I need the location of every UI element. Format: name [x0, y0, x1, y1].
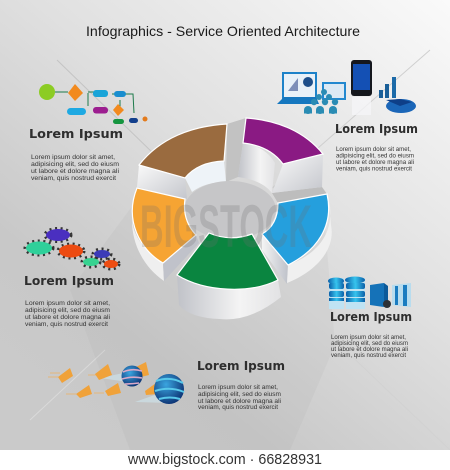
text block: left: adipisicing elit, sed do eiusm [25, 307, 110, 314]
text block: left: veniam, quis nostrud exercit [25, 321, 108, 328]
centre hub [184, 181, 276, 239]
stock watermark: BIGSTOCK [140, 193, 312, 260]
wall: brown outer [137, 165, 187, 199]
segment: orange [132, 188, 196, 263]
icon: flowchart [39, 84, 148, 124]
text block: left: Lorem Ipsum [24, 273, 114, 288]
text block: right: Lorem Ipsum [330, 309, 412, 324]
3D segmented ring chart [132, 118, 332, 319]
text block: top right: adipisicing elit, sed do eiusm [336, 152, 414, 160]
wall: blue outer band [287, 200, 332, 283]
title: Infographics - Service Oriented Architecture [86, 24, 360, 39]
stock footer text: www.bigstock.com · 66828931 [127, 451, 322, 468]
text block: bottom [197, 358, 285, 411]
wall: orange end [163, 235, 199, 281]
segment: brown [139, 124, 227, 178]
wall: purple inner [238, 143, 275, 193]
text block: left: Lorem ipsum dolor sit amet, [25, 300, 110, 307]
wall: right of purple [272, 154, 323, 193]
text block: top left: ut labore et dolore magna ali [31, 168, 119, 175]
text block: bottom: adipisicing elit, sed do eiusm [198, 391, 281, 398]
wall: blue end [262, 234, 288, 284]
wall: brown inner [185, 161, 226, 192]
text block: bottom: Lorem Ipsum [197, 358, 285, 373]
wall: green outer [177, 275, 281, 319]
text block: right: Lorem ipsum dolor sit amet, [331, 334, 406, 341]
long shadow of the diagram [70, 130, 335, 450]
gap shadow under purple [272, 187, 327, 203]
text block: bottom: veniam, quis nostrud exercit [198, 404, 278, 411]
text block: bottom: ut labore et dolore magna ali [198, 398, 281, 405]
text block: top left [29, 126, 123, 182]
text block: top right: Lorem ipsum dolor sit amet, [336, 146, 411, 153]
text block: top left: Lorem ipsum dolor sit amet, [31, 154, 115, 161]
icon: databases and servers [328, 276, 411, 309]
text block: top right: Lorem Ipsum [335, 121, 418, 136]
text block: top left: adipisicing elit, sed do eiusm [31, 161, 119, 168]
icon: devices and users [277, 60, 416, 115]
gap shadow between brown and purple [226, 118, 246, 182]
segment: purple [243, 118, 323, 164]
text block: top left: veniam, quis nostrud exercit [31, 175, 116, 182]
text block: bottom: Lorem ipsum dolor sit amet, [198, 384, 278, 391]
icon: gears [25, 228, 119, 269]
text block: right: adipisicing elit, sed do eiusm [331, 340, 408, 347]
text block: right: veniam, quis nostrud exercit [331, 352, 406, 359]
text block: top left: Lorem Ipsum [29, 126, 123, 141]
segment: blue [262, 194, 329, 265]
text block: top right: veniam, quis nostrud exercit [336, 166, 412, 172]
wall: orange outer band [132, 217, 164, 281]
icon: mail and globes [48, 362, 184, 404]
text block: left [24, 273, 114, 328]
segment: green [177, 233, 278, 289]
text block: top right: ut labore et dolore magna ali [336, 159, 414, 166]
text block: right: ut labore et dolore magna ali [331, 346, 408, 353]
text block: top right [335, 121, 418, 172]
text block: left: ut labore et dolore magna ali [25, 314, 110, 321]
text block: right [330, 309, 412, 359]
